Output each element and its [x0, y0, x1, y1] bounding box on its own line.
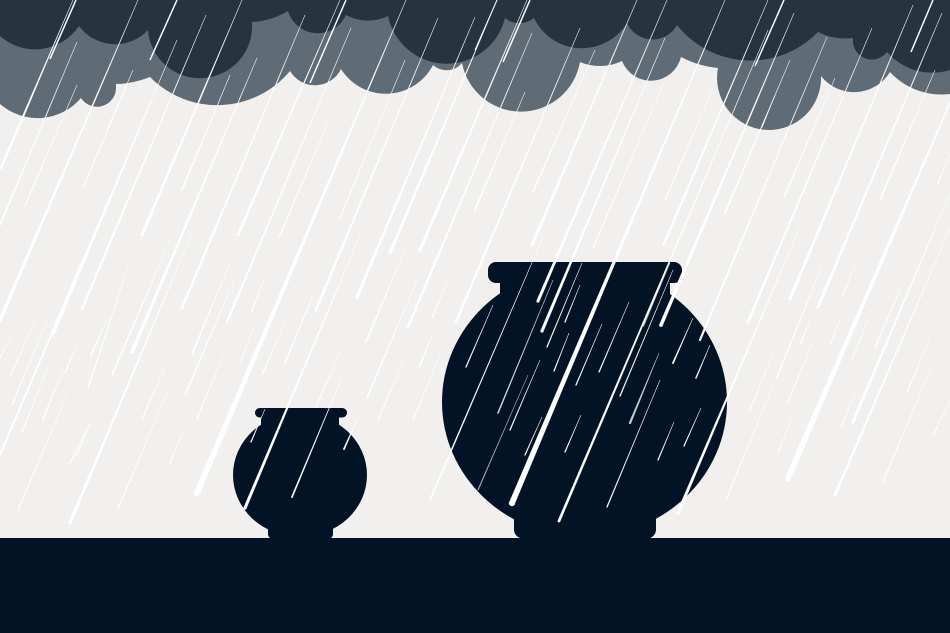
cloud: light back layer: [0, 0, 950, 130]
rain: centre streaks: [107, 0, 637, 420]
rain: right streaks: [536, 0, 950, 522]
rain: left streaks: [0, 0, 406, 524]
rain: fine streaks over large pot: [429, 237, 710, 508]
rain: big streak over large pot: [509, 0, 725, 506]
ground: [0, 538, 950, 633]
rain: blunt streaks in the dark cloud: [50, 0, 933, 83]
pot: large: [442, 262, 727, 538]
rain: streaks over small pot: [244, 228, 363, 510]
cloud: dark front layer: [0, 0, 950, 78]
pot: small: [233, 408, 367, 539]
